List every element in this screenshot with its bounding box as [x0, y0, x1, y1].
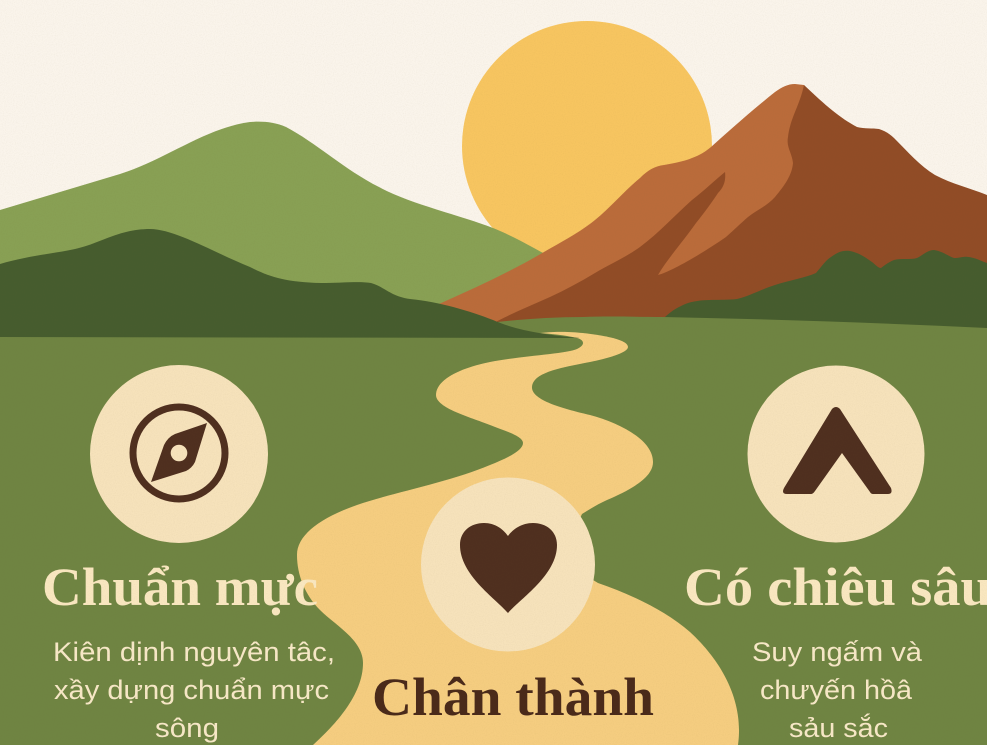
meadow — [0, 317, 987, 745]
text block: Chuẩn mực description — [53, 637, 335, 743]
mountain lit face — [439, 84, 850, 325]
panel: Có chiêu sâu — [684, 366, 987, 743]
winding path — [297, 332, 739, 745]
heading: Chuẩn mực: Chuẩn mực — [42, 557, 318, 617]
sun — [462, 21, 712, 271]
text block: Có chiêu sâu description — [752, 637, 923, 743]
mountain shadow face — [490, 85, 987, 335]
heading: Có chiêu sâu: Có chiêu sâu — [684, 557, 987, 617]
icon: heart — [421, 478, 595, 652]
icon: tent — [748, 366, 924, 542]
left dark green hill — [0, 229, 580, 338]
text block: Có chiêu sâu description: sảu sắc — [789, 712, 888, 743]
text block: Chuẩn mực description: xầy dựng chuẩn mực — [54, 675, 329, 705]
panel: Chuẩn mực — [42, 365, 335, 743]
text block: Chuẩn mực description: Kiên dịnh nguyên tâc, — [53, 637, 335, 667]
heading: Chân thành: Chân thành — [372, 667, 654, 727]
light green hill — [0, 122, 545, 345]
right dark green forest — [664, 250, 987, 335]
text block: Có chiêu sâu description: chưyến hồâ — [760, 675, 913, 705]
brown mountain — [439, 84, 987, 335]
icon: compass — [90, 365, 268, 543]
text block: Chuẩn mực description: sông — [155, 713, 219, 743]
text block: Có chiêu sâu description: Suy ngấm và — [752, 637, 923, 667]
panel: Chân thành — [372, 478, 654, 727]
